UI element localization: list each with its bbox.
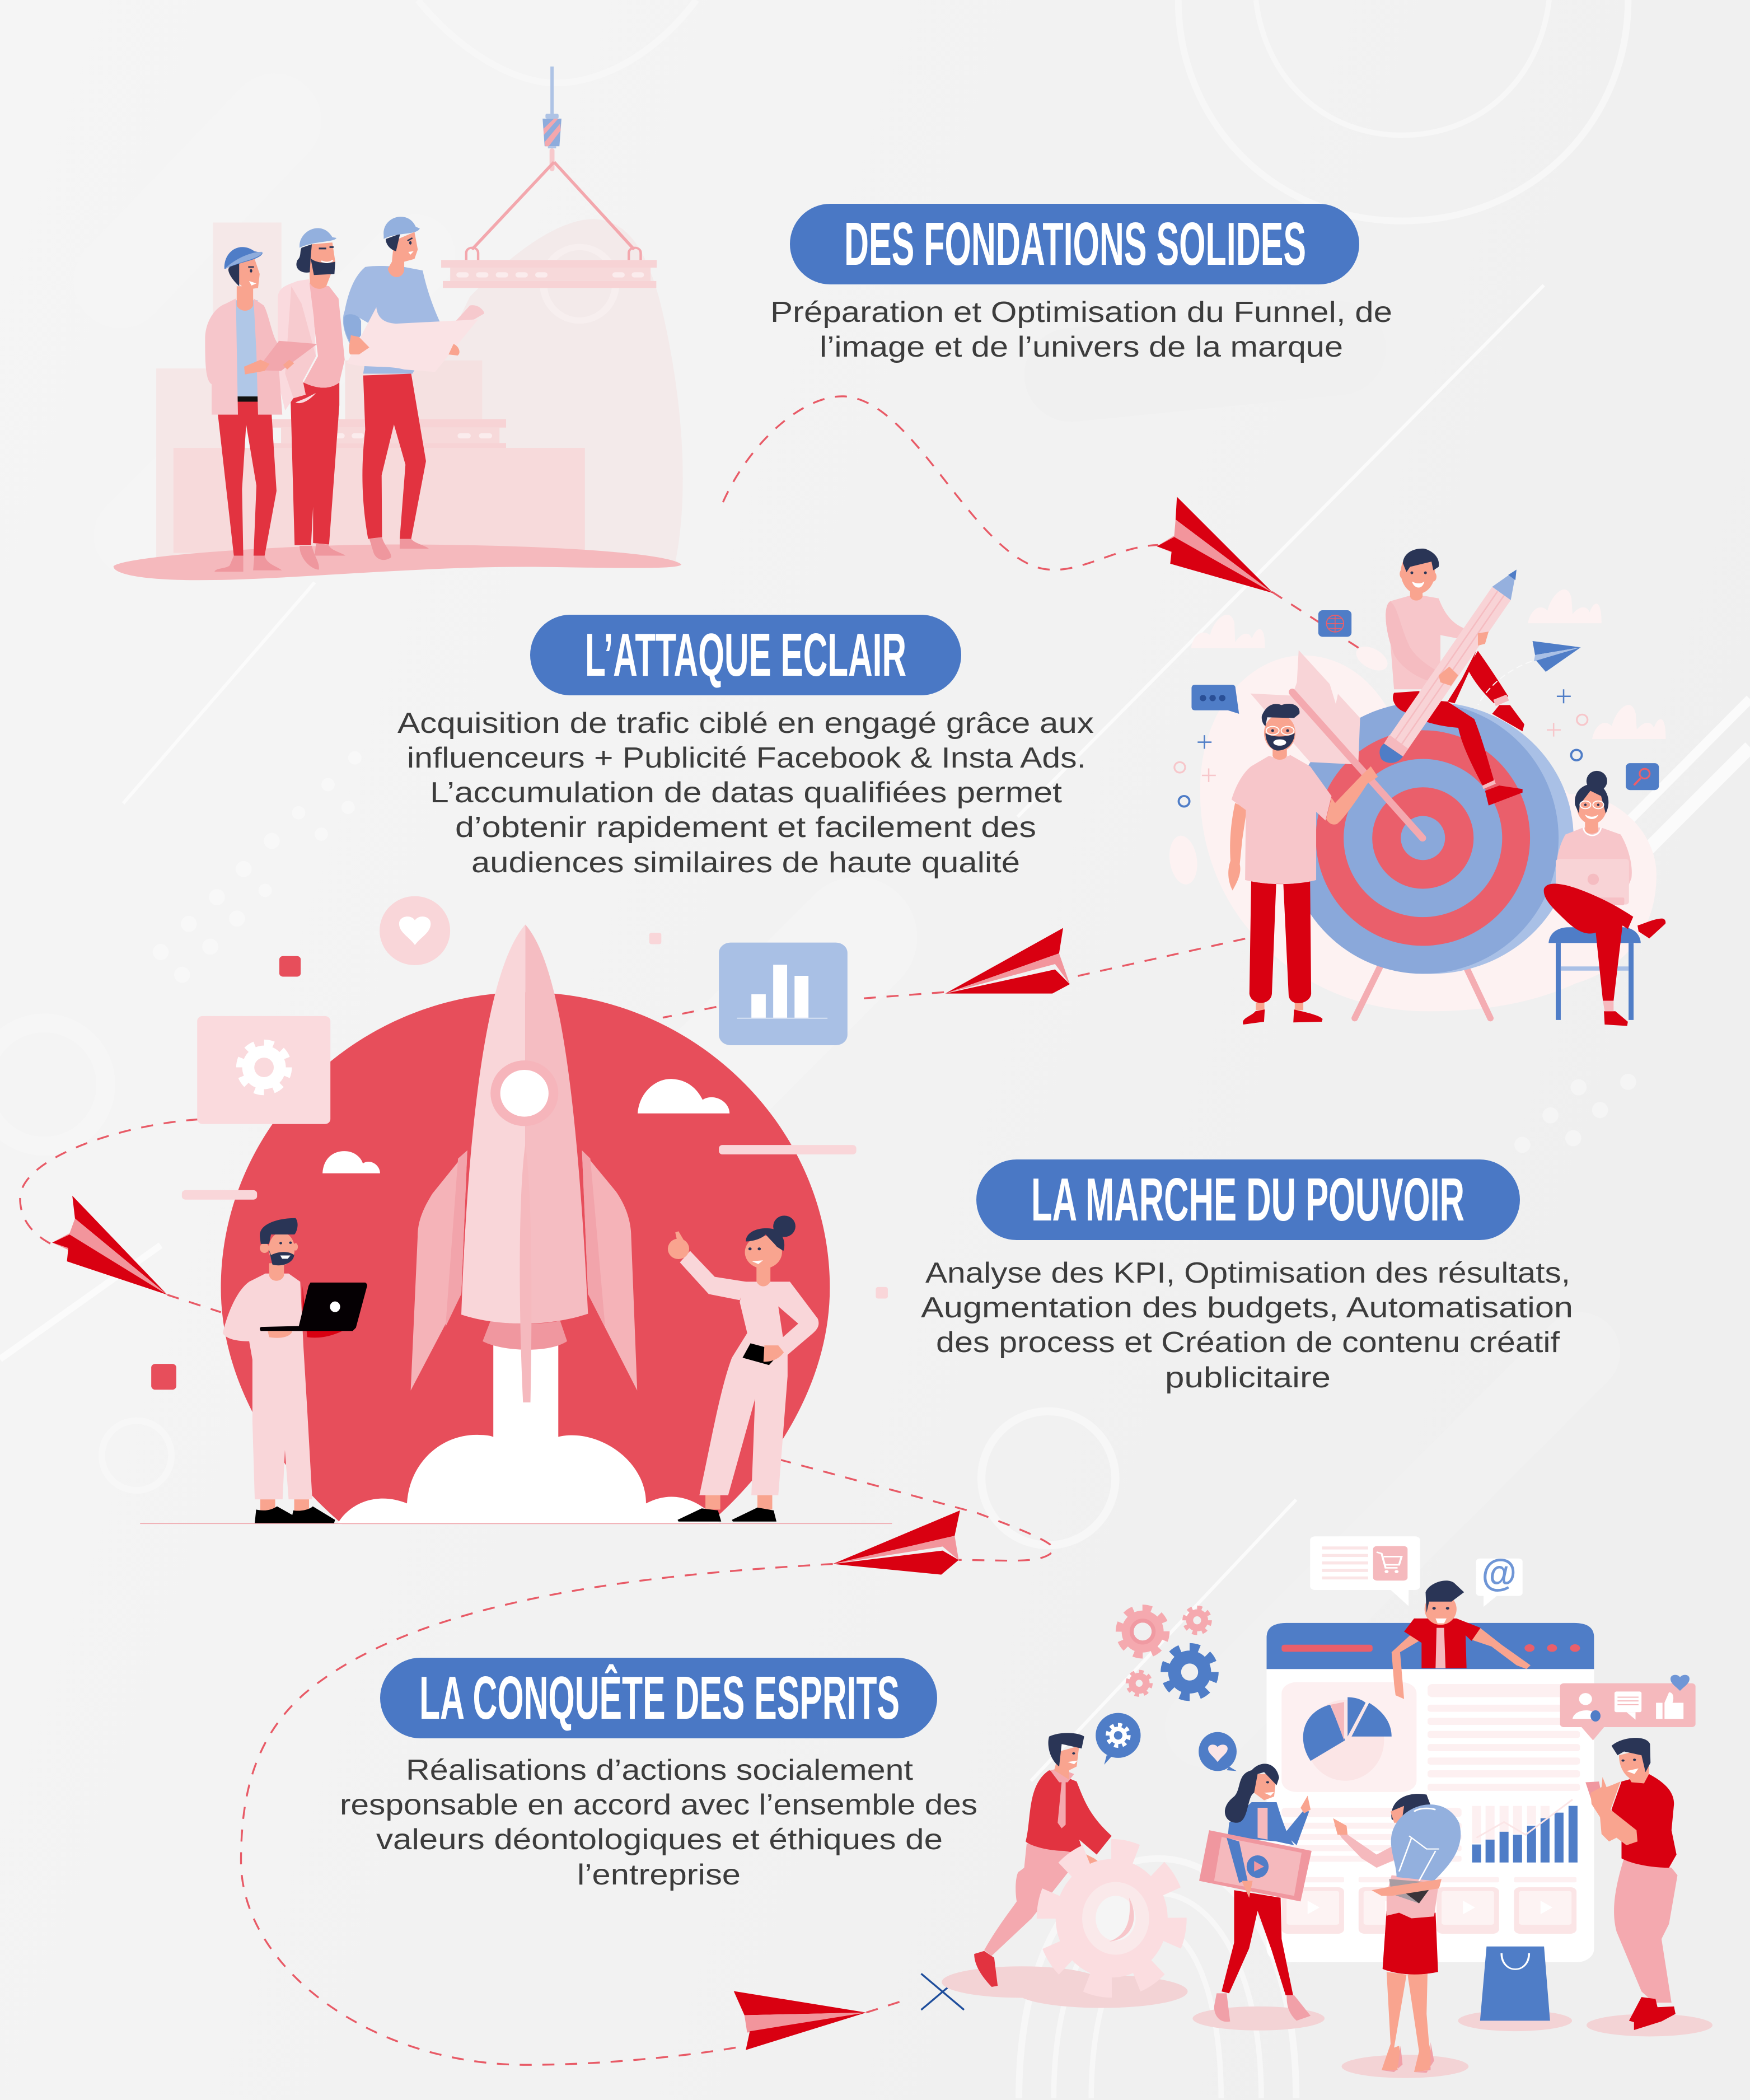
bar chart card (719, 943, 848, 1045)
heart badge (380, 896, 450, 965)
man with laptop (223, 1218, 367, 1523)
floor shadows (942, 1966, 1712, 2078)
icon: blue paper plane (1478, 641, 1581, 705)
small squares (151, 933, 888, 1390)
illustration: digital marketing team (942, 1536, 1712, 2078)
section 3: text: Analyse des KPI, Optimisation des résultats, (925, 1257, 1570, 1289)
bubble: gear (1096, 1713, 1141, 1765)
dashed route (20, 396, 1386, 2065)
builder 2 (278, 228, 345, 570)
paper plane 4 (833, 1510, 960, 1575)
section 3: text: Augmentation des budgets, Automatisation (921, 1292, 1573, 1324)
section 4: heading: LA CONQUÊTE DES ESPRITS (419, 1664, 900, 1732)
section 1: text: l’image et de l’univers de la marque (820, 331, 1343, 363)
section 1: text: Préparation et Optimisation du Funnel, de (770, 296, 1392, 329)
target cross (921, 1973, 964, 2010)
backdrop blob and clouds (1167, 590, 1665, 1011)
section 3: text (921, 1257, 1573, 1394)
man sitting with pencil (1379, 549, 1524, 806)
section 3: text: publicitaire (1165, 1362, 1331, 1394)
section 2: text: d’obtenir rapidement et facilement des (455, 811, 1036, 844)
icon: gears (1120, 1608, 1215, 1697)
icon: magnifier (1626, 763, 1659, 790)
browser window (1267, 1623, 1594, 1962)
section 1: heading (790, 204, 1359, 284)
section 4: text: valeurs déontologiques et éthiques de (376, 1823, 943, 1856)
section 2: text: influenceurs + Publicité Facebook & Insta Ads. (407, 742, 1086, 774)
section 2: heading: L’ATTAQUE ECLAIR (585, 621, 906, 689)
section 2: text: Acquisition de trafic ciblé en engagé grâce aux (397, 707, 1094, 740)
man in red with phone (1585, 1738, 1677, 2030)
icon: chat bubble (1191, 685, 1239, 714)
builder 1 (205, 247, 317, 572)
section 2: text (397, 707, 1094, 879)
crane hook and beam (441, 67, 657, 288)
paper plane 3 (52, 1196, 167, 1295)
bubble: shopping cart (1310, 1536, 1420, 1606)
man pushing gear (974, 1733, 1112, 1987)
section 2: text: L’accumulation de datas qualifiées permet (430, 777, 1063, 809)
section 4: text: Réalisations d’actions socialement (406, 1754, 914, 1786)
builder 3 with blueprint (343, 217, 484, 560)
section 4: text: l’entreprise (577, 1859, 741, 1891)
bubble: at sign: @ (1481, 1551, 1517, 1594)
bubble: at sign (1476, 1551, 1523, 1607)
bubble: heart (1199, 1732, 1237, 1771)
clouds and bars (182, 1079, 857, 1200)
paper plane 5 (734, 1991, 866, 2050)
dashed flight path with paper planes (20, 396, 1386, 2065)
video thumbnails (1281, 1887, 1576, 1934)
section 1: text (770, 296, 1392, 363)
man with beard (1228, 704, 1378, 1025)
illustration: builders and crane (114, 67, 683, 580)
section 4: text (340, 1754, 977, 1891)
scenery behind builders (156, 219, 683, 563)
section 2: heading (530, 615, 961, 695)
settings card (197, 1016, 330, 1124)
shopping bag (1480, 1947, 1550, 2021)
woman with light bulb (1333, 1794, 1461, 2073)
section 3: text: des process et Création de contenu créatif (936, 1326, 1560, 1359)
woman with tablet (1199, 1764, 1312, 2022)
section 2: text: audiences similaires de haute qualité (471, 846, 1020, 879)
target (1287, 702, 1574, 1018)
section 4: heading (380, 1658, 937, 1738)
rocket (411, 924, 637, 1444)
woman pointing (668, 1215, 818, 1522)
section 3: heading (976, 1159, 1520, 1240)
illustration: rocket launch (140, 896, 892, 1524)
pie chart (1303, 1697, 1392, 1781)
section 4: text: responsable en accord avec l’ensemble des (340, 1789, 977, 1821)
ground line (140, 1523, 892, 1524)
icon: globe (1318, 610, 1351, 637)
paper plane 1 (1157, 497, 1274, 593)
woman on stool (1544, 771, 1665, 1026)
arrow (1251, 650, 1423, 838)
man in browser (1392, 1580, 1531, 1699)
illustration: target team (1167, 549, 1665, 1026)
decorative plus signs and rings (1175, 689, 1588, 807)
ground (114, 544, 681, 580)
bubble: social reactions (1560, 1675, 1696, 1740)
line and bars chart (1472, 1799, 1578, 1863)
large pink gear (1049, 1852, 1174, 1985)
section 1: heading: DES FONDATIONS SOLIDES (844, 210, 1306, 278)
exhaust cloud (338, 1435, 720, 1524)
paper plane 2 (946, 928, 1070, 994)
red disc (221, 992, 830, 1524)
